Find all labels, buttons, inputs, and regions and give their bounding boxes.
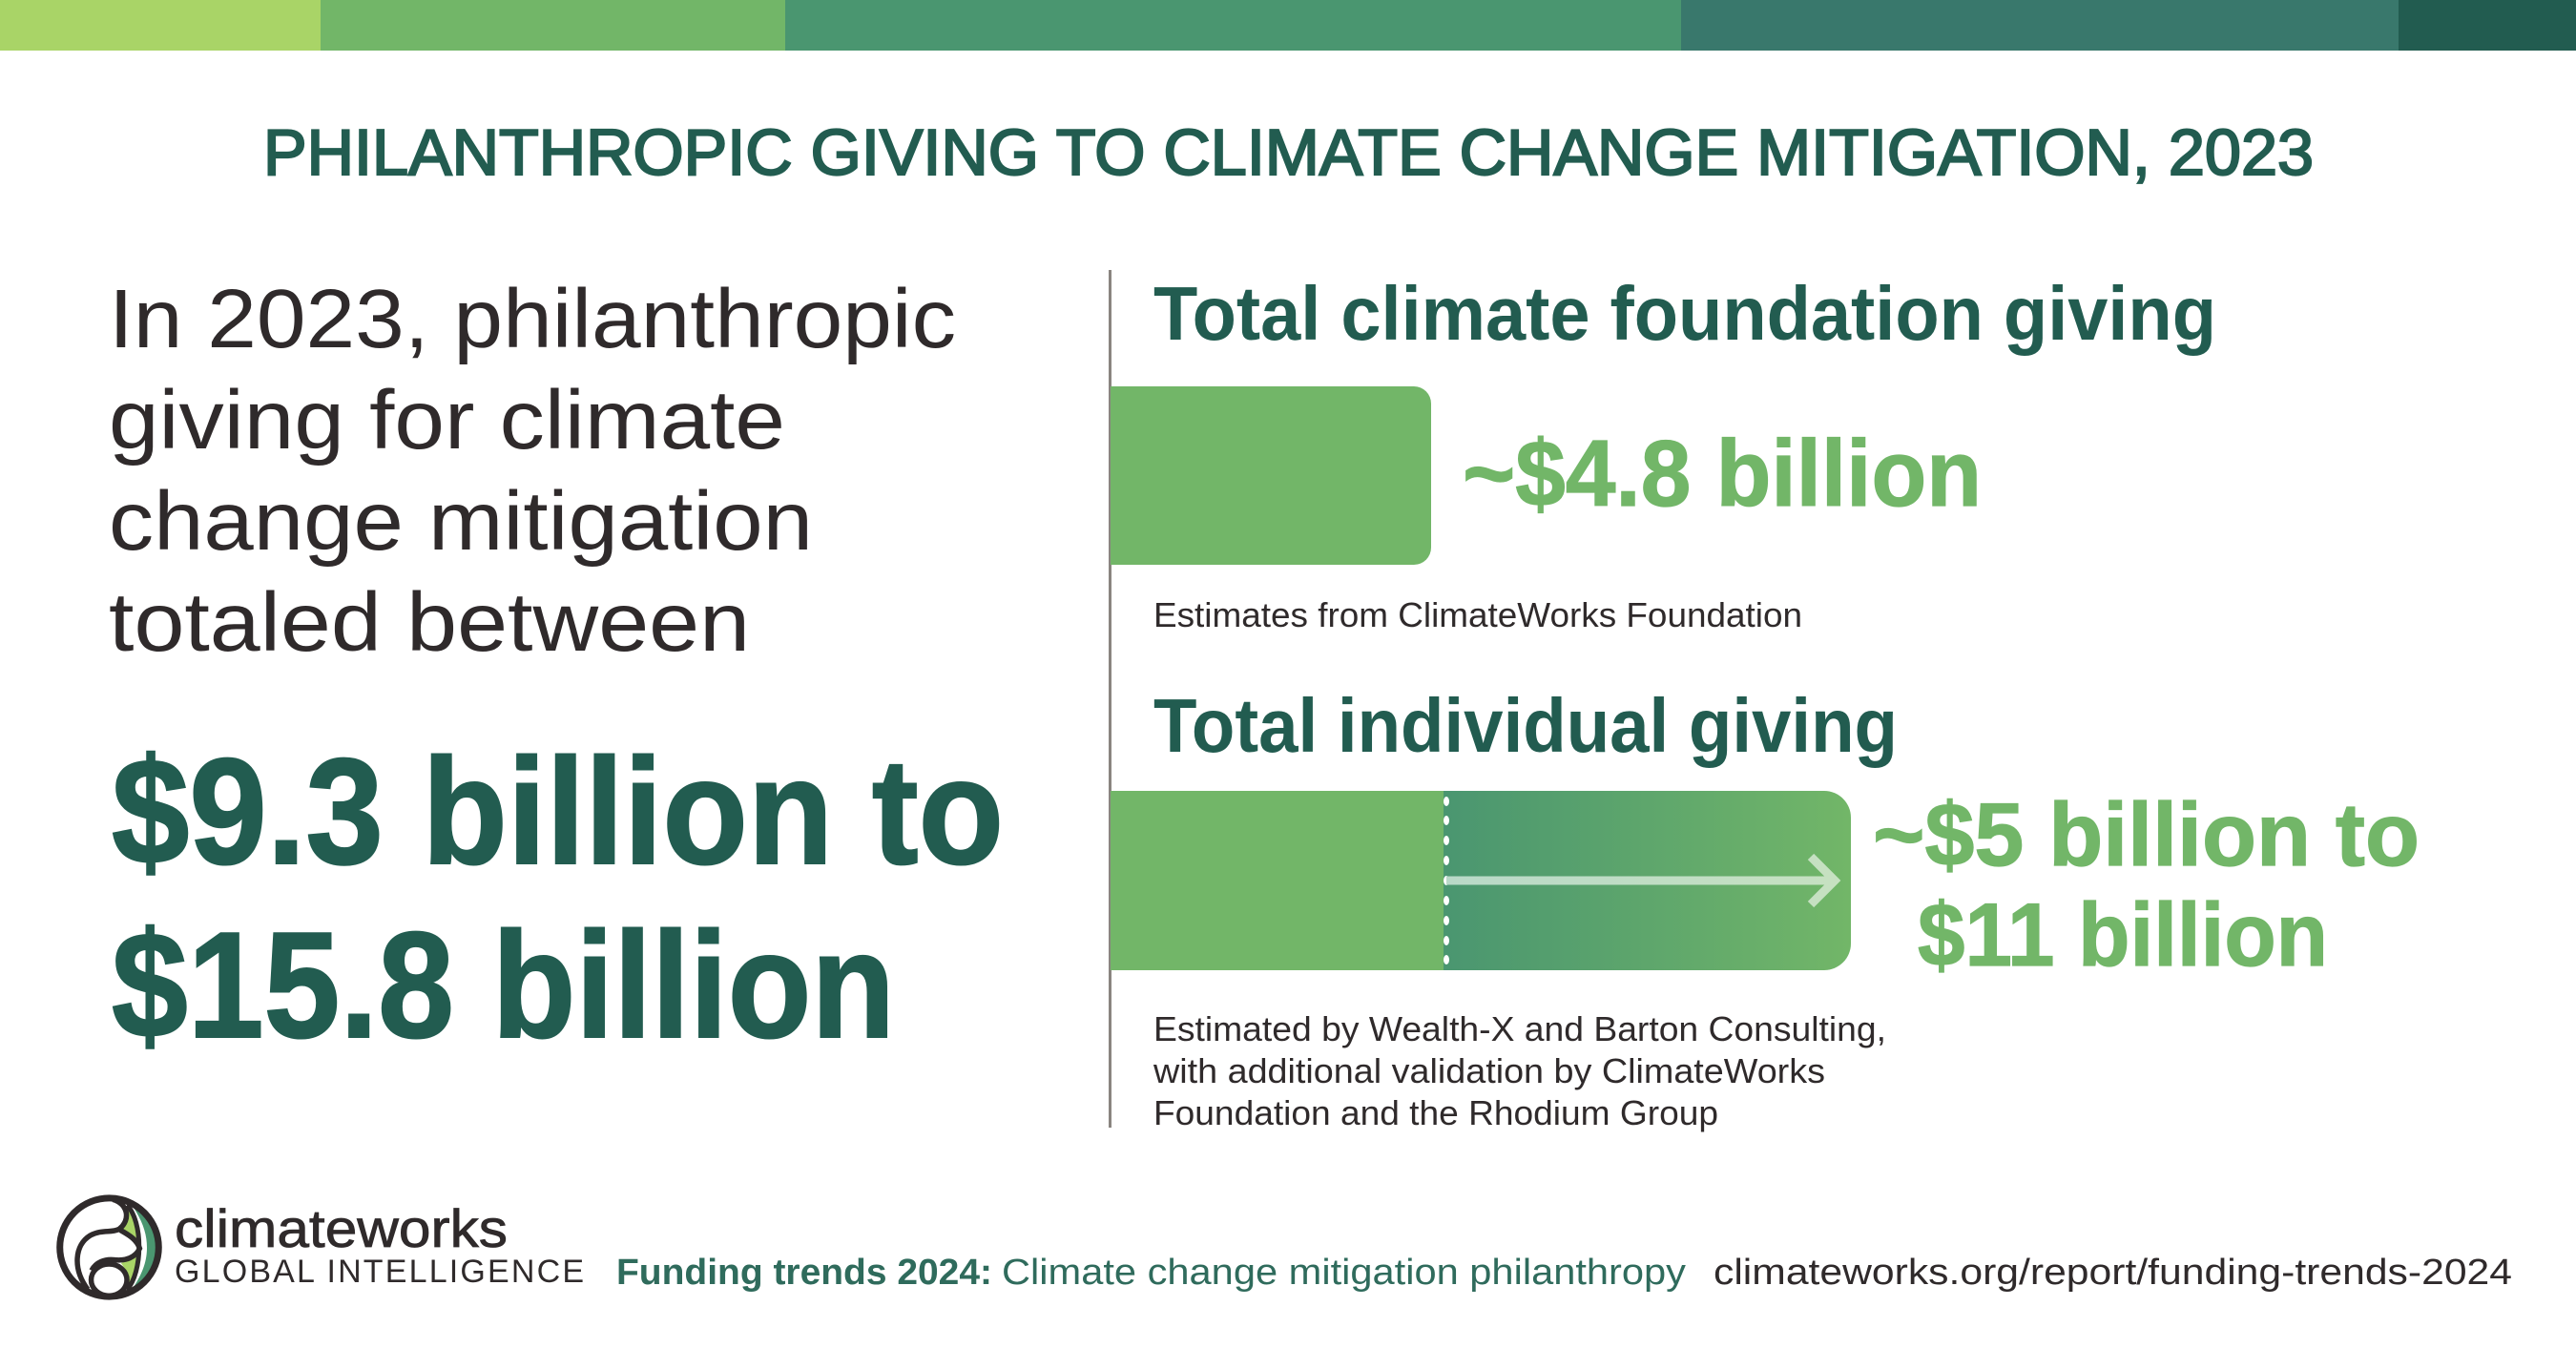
source: individual giving: with additional validation by ClimateWorks (1153, 1051, 1825, 1090)
logo wordmark (175, 1198, 584, 1290)
footer report title: Climate change mitigation philanthropy (1002, 1253, 1686, 1293)
logo wordmark: GLOBAL INTELLIGENCE (175, 1254, 584, 1290)
arrow (1446, 857, 1835, 904)
headline range (112, 728, 1004, 1069)
bar: foundation giving (1111, 386, 1431, 565)
logo mark (60, 1198, 158, 1296)
footer report title: Funding trends 2024: (616, 1253, 992, 1293)
source: foundation giving: Estimates from ClimateWorks Foundation (1153, 595, 1802, 634)
value: individual giving (1873, 784, 2420, 985)
vertical axis (1109, 270, 1111, 1128)
logo wordmark: climateworks (175, 1198, 508, 1258)
top colour band (0, 0, 2576, 51)
title: PHILANTHROPIC GIVING TO CLIMATE CHANGE MITIGATION, 2023 (263, 116, 2314, 189)
value: individual giving: $11 billion (1918, 884, 2328, 985)
dotted marker (1444, 797, 1449, 964)
heading: individual giving: Total individual giving (1153, 683, 1898, 768)
intro text: In 2023, philanthropic (109, 273, 956, 365)
intro text (109, 273, 956, 669)
footer url: climateworks.org/report/funding-trends-2024 (1714, 1253, 2512, 1293)
value: individual giving: ~$5 billion to (1873, 784, 2420, 884)
source: individual giving: Estimated by Wealth-X and Barton Consulting, (1153, 1009, 1886, 1048)
bar: individual giving (1111, 791, 1851, 970)
intro text: change mitigation (109, 475, 813, 568)
headline range: $15.8 billion (112, 902, 895, 1069)
heading: foundation giving: Total climate foundation giving (1153, 271, 2216, 356)
intro text: totaled between (109, 576, 750, 669)
headline range: $9.3 billion to (112, 728, 1004, 896)
intro text: giving for climate (109, 374, 785, 467)
source: individual giving: Foundation and the Rhodium Group (1153, 1093, 1718, 1132)
footer report title (616, 1253, 1686, 1293)
value: foundation giving: ~$4.8 billion (1463, 421, 1982, 526)
source: individual giving (1153, 1009, 1886, 1132)
